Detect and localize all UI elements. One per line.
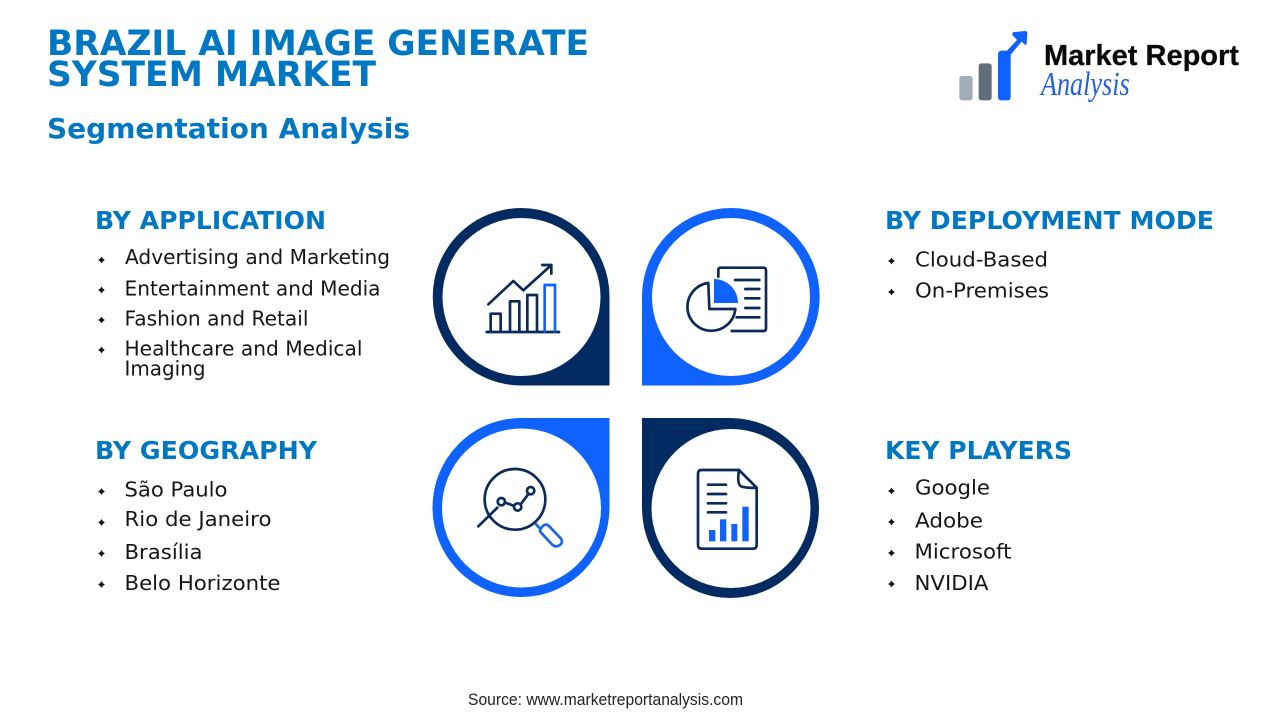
- list: On-Premises: [915, 278, 1049, 302]
- list: [888, 476, 1012, 595]
- list: Imaging: [124, 356, 206, 380]
- title: SYSTEM MARKET: [47, 55, 376, 95]
- logo wordmark: [1039, 40, 1239, 103]
- list: Fashion and Retail: [124, 306, 308, 330]
- icon badge: key players report: [642, 418, 819, 598]
- panel: by geography: [95, 436, 317, 595]
- icon: pie chart and document: [687, 268, 766, 331]
- list: Microsoft: [914, 540, 1012, 564]
- heading: KEY PLAYERS: [885, 436, 1072, 465]
- icon: bar chart with arrow: [487, 265, 559, 332]
- subtitle: Segmentation Analysis: [47, 113, 410, 145]
- heading: BY GEOGRAPHY: [95, 436, 317, 465]
- icon badge: application growth chart: [433, 208, 610, 386]
- list: Belo Horizonte: [124, 571, 280, 595]
- list: [98, 478, 280, 595]
- logo: [959, 31, 1239, 103]
- icon: magnifying glass with trend line: [478, 469, 562, 546]
- title: [47, 24, 589, 95]
- list: [98, 245, 390, 380]
- list: Google: [915, 476, 990, 500]
- list: São Paulo: [124, 478, 228, 502]
- list: Cloud-Based: [915, 248, 1048, 272]
- list: Rio de Janeiro: [124, 507, 272, 531]
- panel: by application: [95, 206, 390, 380]
- logo icon: rising bars with arrow: [959, 31, 1027, 100]
- icon: document with bars: [698, 470, 757, 549]
- list: Brasília: [124, 540, 202, 564]
- title: BRAZIL AI IMAGE GENERATE: [47, 24, 589, 64]
- list: Advertising and Marketing: [125, 245, 390, 269]
- heading: BY APPLICATION: [95, 206, 326, 235]
- list: Healthcare and Medical: [124, 336, 362, 360]
- list: Adobe: [915, 508, 983, 532]
- heading: BY DEPLOYMENT MODE: [885, 206, 1214, 235]
- list: Entertainment and Media: [124, 276, 380, 300]
- panel: by deployment mode: [885, 206, 1214, 302]
- icon badge: geography magnifier: [433, 418, 610, 597]
- logo wordmark: Analysis: [1039, 66, 1130, 103]
- list: [888, 248, 1049, 302]
- source note: Source: www.marketreportanalysis.com: [468, 691, 743, 709]
- panel: key players: [885, 436, 1072, 595]
- icon badge: deployment pie report: [642, 208, 820, 386]
- list: NVIDIA: [914, 571, 988, 595]
- logo wordmark: Market Report: [1044, 40, 1239, 72]
